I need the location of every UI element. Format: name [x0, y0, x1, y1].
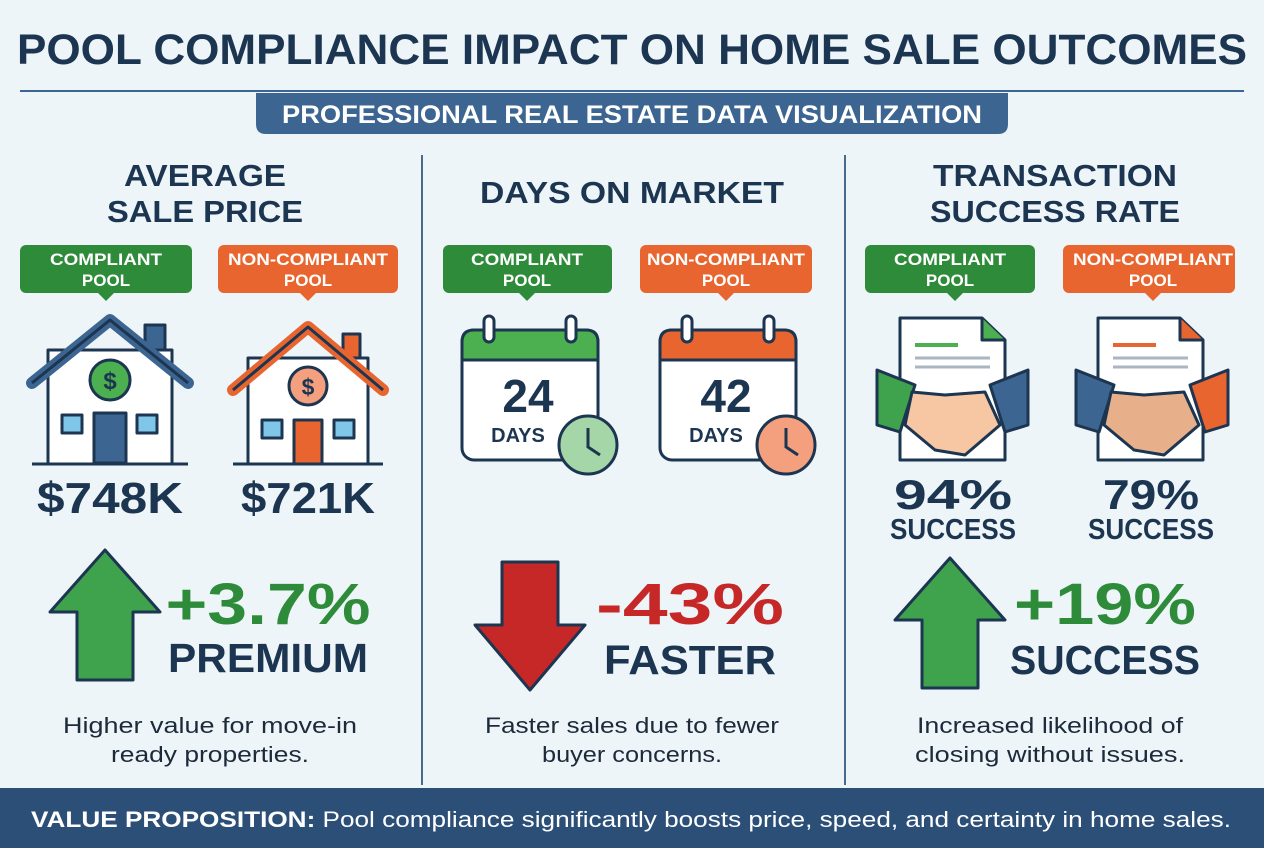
description: buyer concerns. — [542, 742, 722, 767]
stat: +3.7% premium — [166, 572, 370, 681]
label: non-compliant pool — [640, 245, 812, 301]
description: Increased likelihood of — [917, 713, 1184, 738]
icon: calendar 42 days: DAYS — [689, 425, 743, 447]
stat: +19% success: SUCCESS — [1010, 637, 1200, 683]
label: non-compliant pool: POOL — [284, 271, 332, 290]
icon: calendar 42 days — [660, 316, 815, 474]
icon: house non-compliant: $ — [302, 374, 315, 400]
label: non-compliant pool: POOL — [1129, 271, 1177, 290]
heading: average sale price — [107, 158, 303, 229]
icon: calendar 24 days: 24 — [502, 370, 554, 422]
heading: transaction success rate: TRANSACTION — [933, 158, 1177, 193]
stat: 94% success: SUCCESS — [890, 514, 1016, 546]
subtitle banner — [256, 93, 1008, 134]
icon: handshake non-compliant — [1076, 318, 1228, 460]
icon: calendar 24 days: DAYS — [491, 425, 545, 447]
panel: average sale price — [20, 158, 398, 767]
price compliant: $748K — [37, 474, 183, 523]
heading: average sale price: SALE PRICE — [107, 194, 303, 229]
description — [915, 713, 1185, 767]
label: compliant pool: COMPLIANT — [471, 250, 584, 269]
label: compliant pool: POOL — [503, 271, 551, 290]
stat: -43% faster — [596, 572, 784, 683]
label: compliant pool — [443, 245, 612, 301]
label: non-compliant pool: NON-COMPLIANT — [1073, 250, 1234, 269]
label: compliant pool: POOL — [82, 271, 130, 290]
label: non-compliant pool: POOL — [702, 271, 750, 290]
stat: +19% success — [1010, 572, 1200, 683]
stat: -43% faster: -43% — [596, 572, 784, 637]
stat: 94% success — [890, 471, 1016, 546]
stat: 79% success: 79% — [1103, 471, 1199, 518]
heading: transaction success rate — [930, 158, 1180, 229]
arrow: down red — [475, 562, 585, 690]
subtitle banner: PROFESSIONAL REAL ESTATE DATA VISUALIZATION — [282, 101, 982, 129]
panel: transaction success rate — [865, 158, 1235, 767]
label: compliant pool — [865, 245, 1035, 301]
description — [485, 713, 779, 767]
icon: handshake compliant — [877, 318, 1028, 460]
stat: 94% success: 94% — [894, 471, 1012, 518]
icon: house compliant: $ — [103, 368, 117, 395]
label: non-compliant pool — [1063, 245, 1235, 301]
description: ready properties. — [111, 742, 309, 767]
stat: +19% success: +19% — [1014, 572, 1196, 637]
stat: 79% success — [1088, 471, 1214, 546]
icon: calendar 42 days: 42 — [700, 370, 752, 422]
description: Faster sales due to fewer — [485, 713, 779, 738]
footer: value proposition — [0, 788, 1264, 848]
label: compliant pool: COMPLIANT — [894, 250, 1007, 269]
heading: days on market: DAYS ON MARKET — [480, 175, 784, 210]
label: compliant pool: POOL — [926, 271, 974, 290]
label: non-compliant pool — [218, 245, 398, 301]
icon: house compliant — [32, 320, 188, 464]
stat: +3.7% premium: PREMIUM — [168, 635, 368, 681]
description: closing without issues. — [915, 742, 1185, 767]
title: POOL COMPLIANCE IMPACT ON HOME SALE OUTCOMES — [17, 26, 1247, 74]
label: non-compliant pool: NON-COMPLIANT — [647, 250, 806, 269]
arrow: up green — [50, 550, 160, 680]
arrow: up green — [895, 558, 1005, 688]
panel: days on market — [443, 175, 815, 767]
heading: average sale price: AVERAGE — [124, 158, 286, 193]
label: compliant pool — [20, 245, 192, 301]
footer: value proposition: VALUE PROPOSITION: Pool compliance significantly boosts price, speed, and certainty in home sales. — [31, 807, 1231, 832]
icon: house non-compliant — [233, 327, 383, 464]
stat: +3.7% premium: +3.7% — [166, 572, 370, 637]
label: non-compliant pool: NON-COMPLIANT — [228, 250, 389, 269]
price non-compliant: $721K — [241, 474, 375, 523]
description — [63, 713, 357, 767]
stat: -43% faster: FASTER — [604, 637, 776, 683]
icon: calendar 24 days — [462, 316, 617, 474]
stat: 79% success: SUCCESS — [1088, 514, 1214, 546]
heading: transaction success rate: SUCCESS RATE — [930, 194, 1180, 229]
label: compliant pool: COMPLIANT — [50, 250, 163, 269]
description: Higher value for move-in — [63, 713, 357, 738]
